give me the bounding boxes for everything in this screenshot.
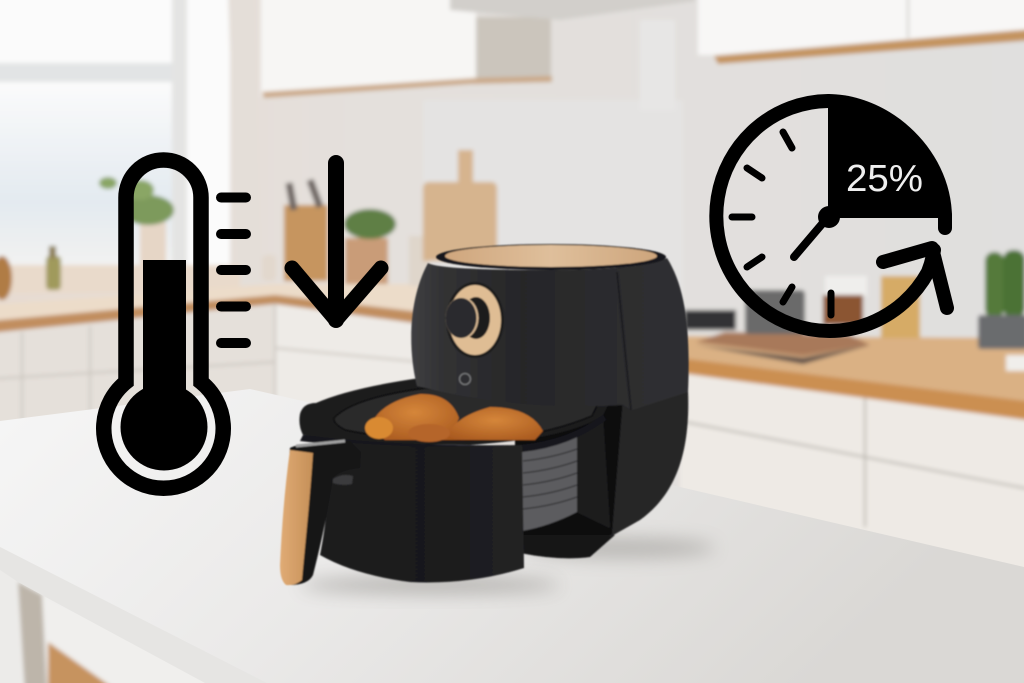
thermometer column: [143, 260, 186, 400]
hob: [684, 310, 736, 330]
thermometer bulb: [120, 384, 208, 470]
left counter: [0, 284, 420, 440]
thermometer icon: [104, 160, 246, 488]
jar and plant: [262, 209, 429, 286]
basket rim: [299, 378, 610, 445]
control dial: [446, 282, 504, 358]
basket front: [320, 442, 524, 582]
basket ribs: [520, 418, 610, 531]
percentage label: 25%: [846, 158, 923, 200]
window plant: [99, 177, 174, 266]
thermometer outline: [104, 160, 223, 488]
clock ticks: [732, 132, 831, 315]
fryer wood lid: [445, 245, 657, 267]
knife block: [284, 180, 328, 281]
arrowhead: [883, 248, 947, 308]
right counter: [680, 336, 1024, 600]
cutting board: [423, 150, 497, 261]
clock ring and arrow shaft: [716, 101, 934, 331]
fryer upper body: [411, 258, 689, 410]
rim front lip: [300, 415, 606, 452]
fryer lid rim: [436, 244, 666, 270]
wooden tray: [696, 332, 870, 364]
marble countertop: [0, 389, 1024, 683]
fryer base: [520, 530, 615, 558]
upper cabinet left: [261, 0, 695, 110]
fryer lower body: [610, 390, 688, 537]
tile panel: [423, 100, 683, 360]
upper cabinet right: [698, 0, 1024, 64]
canister: [881, 276, 920, 338]
counter base bottom left: [0, 540, 290, 683]
clock icon: [716, 94, 952, 331]
logo: [460, 374, 470, 384]
clock quarter wedge: [828, 94, 952, 218]
temperature scale ticks: [221, 198, 246, 343]
pot: [745, 290, 805, 334]
window: [0, 0, 262, 300]
down arrow icon: [292, 163, 381, 320]
clock hand: [794, 217, 828, 257]
basket well: [334, 388, 600, 440]
cactus plant: [978, 250, 1024, 371]
slot interior: [515, 400, 623, 535]
air fryer: [280, 244, 689, 585]
clock hub: [818, 206, 840, 228]
chicken pieces: [365, 394, 543, 442]
handle: [280, 441, 361, 585]
glass jar: [823, 276, 867, 325]
bottle and bowl: [0, 246, 61, 300]
